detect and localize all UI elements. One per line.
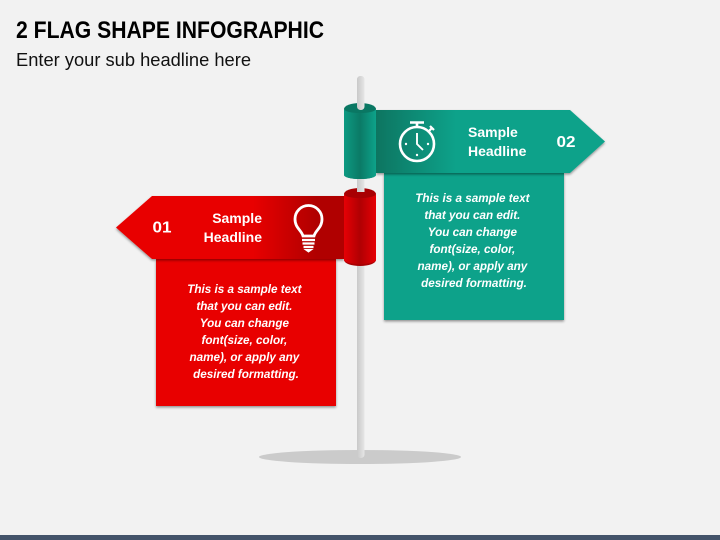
red arrow banner bbox=[116, 196, 344, 259]
red headline: Headline bbox=[204, 229, 262, 245]
red body text: You can change bbox=[200, 317, 289, 330]
pole segment over green top bbox=[357, 76, 364, 110]
number 02: 02 bbox=[556, 134, 576, 151]
pole segment between cylinders bbox=[357, 179, 364, 189]
pole bbox=[357, 76, 364, 458]
icon: light bulb bbox=[295, 206, 322, 252]
number 01: 01 bbox=[152, 220, 172, 236]
red body text: name), or apply any bbox=[189, 351, 300, 364]
red body text: font(size, color, bbox=[202, 334, 287, 347]
red body text: This is a sample text bbox=[187, 283, 303, 296]
red text panel bbox=[156, 259, 336, 406]
title: 2 FLAG SHAPE INFOGRAPHIC bbox=[16, 17, 324, 44]
footer bar bbox=[0, 535, 720, 540]
green body text: name), or apply any bbox=[417, 260, 528, 273]
pole shadow bbox=[259, 450, 461, 464]
green headline: Headline bbox=[468, 143, 527, 159]
red headline: Sample bbox=[212, 210, 262, 226]
red body text: desired formatting. bbox=[193, 368, 299, 381]
green headline: Sample bbox=[468, 124, 518, 140]
green text panel bbox=[384, 173, 564, 320]
red cylinder back bbox=[344, 188, 376, 200]
green arrow banner bbox=[376, 110, 605, 173]
green body text: font(size, color, bbox=[430, 243, 515, 256]
green cylinder wrap bbox=[344, 109, 376, 179]
subtitle: Enter your sub headline here bbox=[16, 50, 251, 70]
red cylinder bottom bbox=[344, 254, 376, 266]
green body text: that you can edit. bbox=[424, 209, 520, 222]
green cylinder bottom bbox=[344, 171, 376, 179]
green cylinder back bbox=[344, 103, 376, 115]
red body text: that you can edit. bbox=[196, 300, 292, 313]
icon: stopwatch bbox=[400, 122, 434, 161]
red cylinder wrap bbox=[344, 194, 376, 264]
panel: green flag 02 bbox=[344, 76, 605, 320]
pole segment over red top bbox=[357, 180, 364, 192]
green body text: This is a sample text bbox=[415, 192, 531, 205]
panel: red flag 01 bbox=[116, 180, 376, 406]
green body text: You can change bbox=[428, 226, 517, 239]
green body text: desired formatting. bbox=[421, 277, 527, 290]
